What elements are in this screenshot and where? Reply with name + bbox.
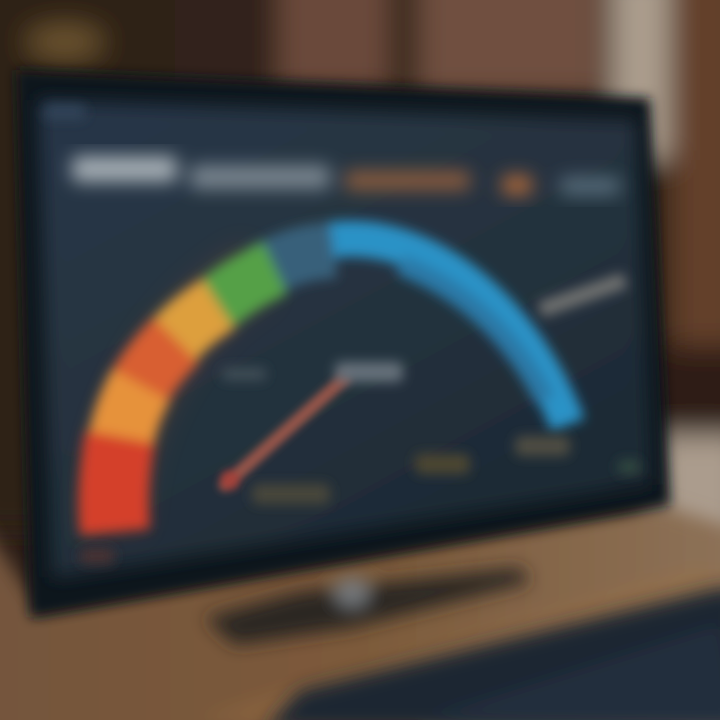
gauge segment: red: [114, 437, 120, 532]
title: white text: [72, 156, 177, 182]
label: left: [222, 368, 266, 380]
background: wooden wall: [0, 0, 720, 560]
gauge segment: yellow: [170, 304, 218, 345]
gauge chart: [112, 239, 568, 532]
gauge segment: green: [212, 268, 275, 308]
title: orange accent: [502, 175, 532, 195]
monitor bezel: [16, 70, 670, 618]
label: lower left: [252, 484, 330, 504]
label: lower right: [515, 436, 570, 456]
title: end text: [560, 177, 620, 195]
table surface: [0, 505, 720, 720]
label: corner: [80, 548, 114, 564]
label: lower middle: [415, 454, 470, 474]
title: grey text: [190, 165, 330, 189]
arc glow: [112, 270, 260, 530]
title: orange text: [345, 171, 470, 190]
gauge segment: blue-grey: [262, 250, 335, 272]
gauge labels: [45, 105, 640, 564]
gauge segment: orange-red: [135, 340, 176, 395]
gauge segment: inner blue: [400, 265, 545, 400]
gauge segment: bright blue: [332, 239, 568, 425]
label: far right: [618, 460, 640, 474]
keyboard: [265, 588, 720, 720]
needle: [220, 378, 345, 490]
label: needle value: [335, 362, 403, 382]
label: top left: [45, 105, 85, 119]
label: upper right: [540, 280, 625, 310]
monitor screen: [38, 100, 652, 578]
monitor: [16, 70, 670, 645]
monitor stand: [205, 568, 530, 645]
title bar: [72, 156, 620, 195]
gauge segment: amber: [120, 385, 141, 445]
